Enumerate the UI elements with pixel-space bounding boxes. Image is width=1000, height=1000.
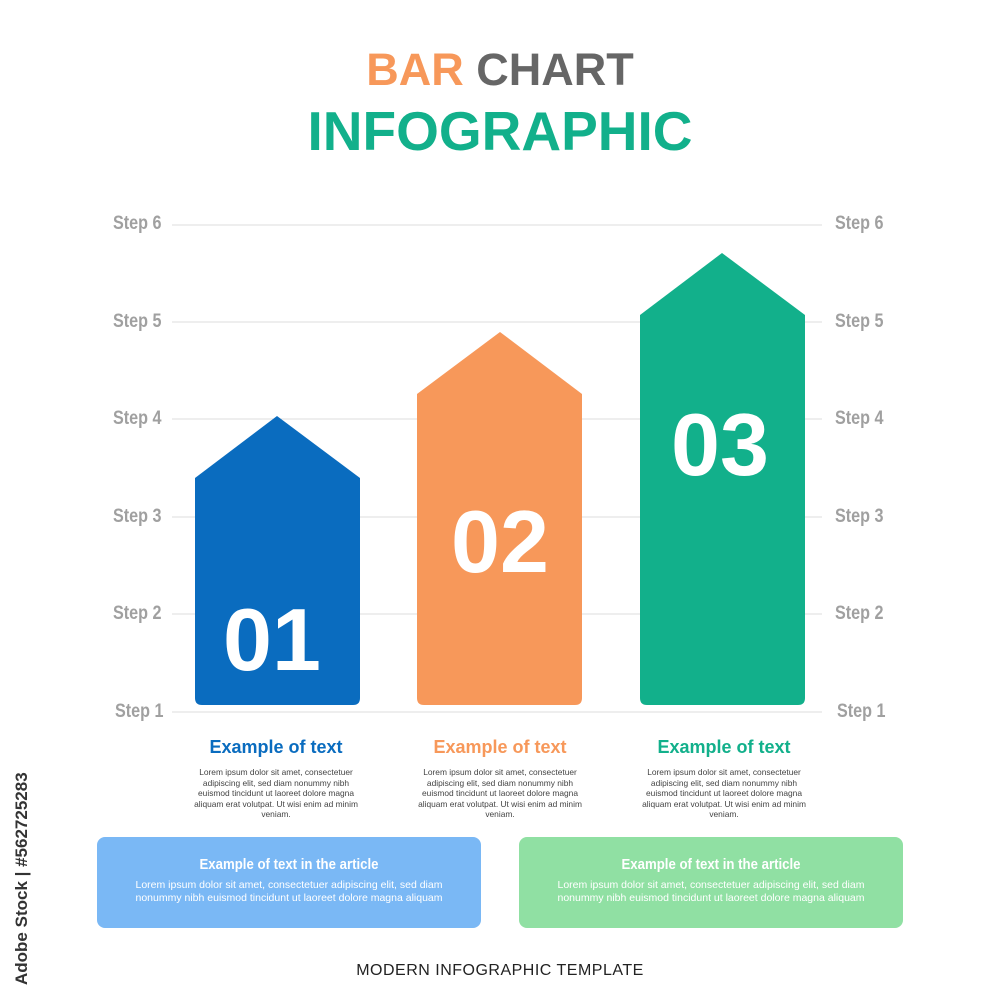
text block 3: Example of text [657,737,791,757]
text: Step 3 [113,506,161,527]
text block 2 [418,737,582,819]
bar 01 [195,416,360,705]
title: BAR CHART [366,44,634,95]
panel: blue article box [97,837,481,928]
text: Step 1 [115,701,163,722]
text block 1: Lorem ipsum dolor sit amet, consectetuer adipiscing elit, sed diam nonummy nibh euismod tincidunt ut laoreet dolore magna aliquam erat volutpat. Ut wisi enim ad minim veniam. [194,767,358,819]
text: Step 6 [835,213,883,234]
text: Step 5 [835,311,883,332]
title: INFOGRAPHIC [308,100,692,162]
text: Step 2 [113,603,161,624]
text block 3 [642,737,806,819]
panel: green article box: nonummy nibh euismod tincidunt ut laoreet dolore magna aliquam [557,892,864,904]
panel: blue article box: Example of text in the article [200,856,378,873]
text: Step 1 [837,701,885,722]
title [308,44,692,162]
text: Step 5 [113,311,161,332]
text block 1: Example of text [209,737,343,757]
bar 01: 01 [223,590,321,689]
panel: green article box: Lorem ipsum dolor sit amet, consectetuer adipiscing elit, sed diam [558,879,864,891]
panel: blue article box: nonummy nibh euismod tincidunt ut laoreet dolore magna aliquam [135,892,442,904]
text block 2: Example of text [433,737,567,757]
text: Step 3 [835,506,883,527]
panel: blue article box: Lorem ipsum dolor sit amet, consectetuer adipiscing elit, sed diam [136,879,442,891]
step labels [113,213,885,722]
bar 03: 03 [671,395,769,494]
text: Step 2 [835,603,883,624]
text: Step 4 [113,408,161,429]
bar 03 [640,253,805,705]
side watermark text: Adobe Stock | #562725283 [12,772,31,985]
text block 2: Lorem ipsum dolor sit amet, consectetuer adipiscing elit, sed diam nonummy nibh euismod tincidunt ut laoreet dolore magna aliquam erat volutpat. Ut wisi enim ad minim veniam. [418,767,582,819]
text: Step 4 [835,408,883,429]
bar 02 [417,332,582,705]
footer: MODERN INFOGRAPHIC TEMPLATE [356,962,644,979]
text: Step 6 [113,213,161,234]
text block 3: Lorem ipsum dolor sit amet, consectetuer adipiscing elit, sed diam nonummy nibh euismod tincidunt ut laoreet dolore magna aliquam erat volutpat. Ut wisi enim ad minim veniam. [642,767,806,819]
text block 1 [194,737,358,819]
panel: green article box: Example of text in the article [622,856,800,873]
bar 02: 02 [451,492,549,591]
panel: green article box [519,837,903,928]
